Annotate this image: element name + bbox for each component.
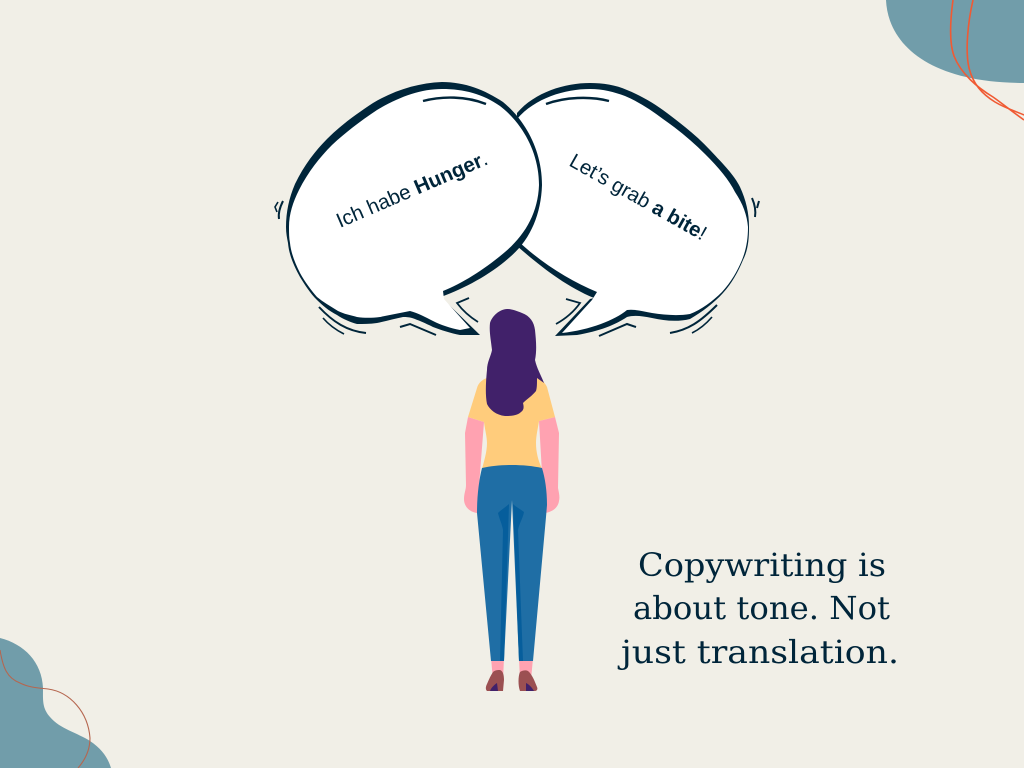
shirt (468, 378, 555, 469)
caption text: about tone. Not (633, 589, 890, 627)
accent stroke on right bubble (546, 98, 609, 104)
caption text: Copywriting is (638, 546, 886, 584)
caption text: just translation. (617, 633, 899, 671)
bottom left decorative blob (0, 638, 111, 768)
left shoe (486, 670, 504, 691)
hair (486, 309, 544, 416)
speech bubble: right, Let's grab a bite (517, 83, 759, 336)
accent stroke on left bubble (423, 98, 486, 104)
motion marks left bubble (275, 201, 478, 335)
trousers (477, 465, 547, 661)
motion marks right bubble (556, 198, 759, 336)
trouser shading (498, 504, 524, 661)
ankles (491, 658, 533, 680)
caption text (617, 546, 899, 671)
right arm (539, 417, 559, 513)
woman figure seen from behind (464, 309, 559, 691)
top right decorative blob (886, 0, 1024, 120)
speech bubble: left, Ich habe Hunger (275, 82, 542, 335)
left arm (464, 417, 484, 513)
bubble text: Ich habe Hunger: Ich habe Hunger. (333, 147, 491, 233)
bubble text: Let's grab a bite: Let’s grab a bite! (566, 150, 710, 245)
right shoe (518, 670, 537, 691)
